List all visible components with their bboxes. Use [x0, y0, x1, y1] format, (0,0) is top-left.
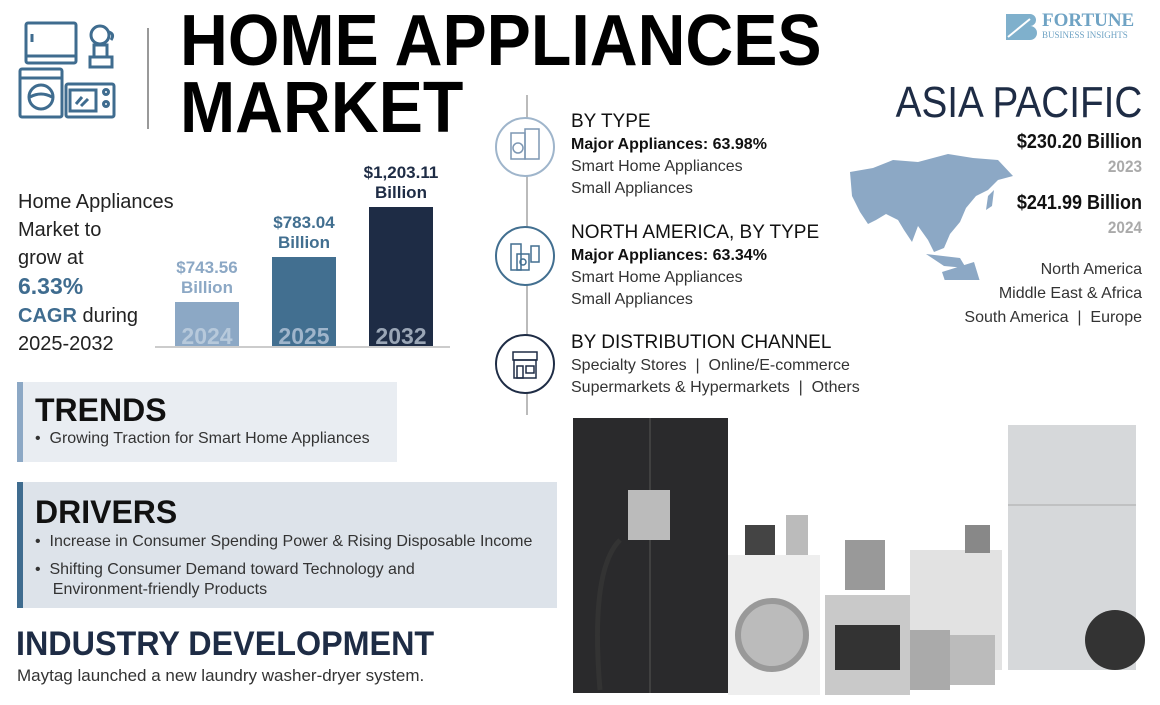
section: distribution channel: Supermarkets & Hypermarkets | Others	[571, 379, 860, 396]
title: HOME APPLIANCES	[180, 1, 822, 81]
icon: north america	[495, 226, 555, 286]
text: CAGR	[18, 191, 174, 355]
text: other regions	[964, 261, 1142, 326]
section: north america: NORTH AMERICA, BY TYPE	[571, 222, 819, 243]
bar chart	[155, 163, 450, 349]
text: CAGR: Market to	[18, 219, 101, 241]
title: MARKET	[180, 68, 463, 148]
panel: drivers: • Increase in Consumer Spending Power & Rising Disposable Income	[35, 533, 532, 550]
text: CAGR: CAGR during	[18, 305, 138, 327]
panel: drivers: Environment-friendly Products	[53, 581, 267, 598]
stats: asia pacific: $230.20 Billion	[1017, 131, 1142, 153]
heading: asia pacific: ASIA PACIFIC	[895, 78, 1142, 127]
section: by type: Small Appliances	[571, 180, 693, 197]
text: CAGR: 2025-2032	[18, 333, 114, 355]
section: by type: BY TYPE	[571, 111, 651, 132]
section: distribution channel: Specialty Stores | Online/E-commerce	[571, 357, 850, 374]
section: north america: Smart Home Appliances	[571, 269, 743, 286]
panel: trends	[17, 382, 397, 462]
logo	[1006, 10, 1134, 40]
section: north america: Small Appliances	[571, 291, 693, 308]
timeline line	[526, 95, 528, 415]
text: CAGR: 6.33%	[18, 273, 83, 299]
panel: trends: • Growing Traction for Smart Home Appliances	[35, 430, 370, 447]
title	[180, 1, 822, 148]
image: appliances	[573, 418, 1145, 695]
text: other regions: North America	[1041, 261, 1142, 278]
icon: by type	[495, 117, 555, 177]
logo: BUSINESS INSIGHTS	[1042, 30, 1128, 40]
stats: asia pacific: $241.99 Billion	[1017, 192, 1142, 214]
heading: industry development: INDUSTRY DEVELOPMENT	[16, 625, 434, 663]
section: distribution channel	[571, 332, 860, 396]
text: development: Maytag launched a new laundry washer-dryer system.	[17, 666, 424, 685]
panel: drivers: • Shifting Consumer Demand toward Technology and	[35, 561, 415, 578]
bar chart: 2032	[375, 323, 427, 349]
panel: drivers	[17, 482, 557, 608]
section: north america	[571, 222, 819, 308]
bar chart: $1,203.11	[364, 163, 438, 182]
section: north america: Major Appliances: 63.34%	[571, 247, 767, 264]
stats: asia pacific	[1017, 131, 1142, 237]
bar chart: 2025	[278, 323, 330, 349]
icon: store	[495, 334, 555, 394]
section: by type: Major Appliances: 63.98%	[571, 136, 767, 153]
bar chart: Billion	[278, 233, 330, 252]
bar chart: Billion	[375, 183, 427, 202]
bar chart: $743.56	[176, 258, 238, 277]
logo: FORTUNE	[1042, 10, 1134, 31]
bar chart: 2024	[181, 323, 233, 349]
panel: trends: TRENDS	[35, 392, 167, 428]
section: distribution channel: BY DISTRIBUTION CHANNEL	[571, 332, 831, 353]
map: asia pacific	[850, 154, 1013, 280]
section: by type	[571, 111, 767, 197]
stats: asia pacific: 2023	[1108, 157, 1142, 176]
bar chart: $783.04	[273, 213, 335, 232]
text: other regions: South America | Europe	[964, 309, 1142, 326]
section: by type: Smart Home Appliances	[571, 158, 743, 175]
text: CAGR: Home Appliances	[18, 191, 174, 213]
text: other regions: Middle East & Africa	[999, 285, 1142, 302]
bar chart: Billion	[181, 278, 233, 297]
panel: drivers: DRIVERS	[35, 494, 177, 530]
icon: appliances	[18, 22, 116, 118]
text: CAGR: grow at	[18, 247, 84, 269]
stats: asia pacific: 2024	[1108, 218, 1142, 237]
